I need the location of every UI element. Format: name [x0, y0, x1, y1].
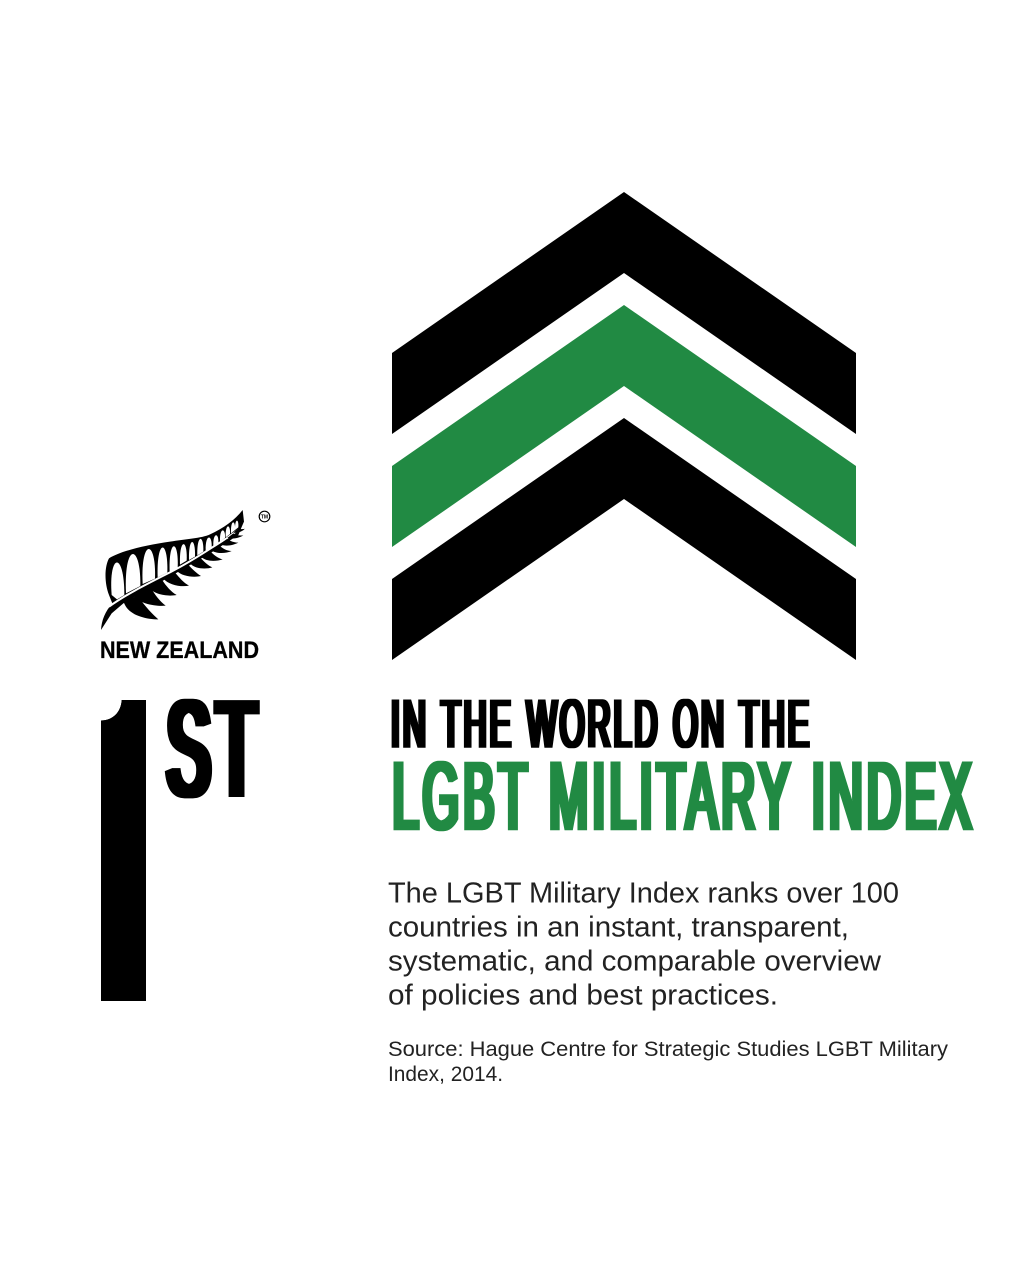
- icon: three stacked chevrons: [392, 192, 856, 660]
- source note: Index, 2014.: [388, 1063, 503, 1086]
- body paragraph: of policies and best practices.: [388, 980, 778, 1012]
- source note: [388, 1038, 949, 1086]
- icon: silver fern logo: [101, 510, 245, 630]
- body paragraph: The LGBT Military Index ranks over 100: [388, 878, 899, 910]
- infographic canvas: ST: [167, 673, 263, 824]
- infographic canvas: [101, 192, 974, 1084]
- body paragraph: [388, 878, 899, 1012]
- source note: Source: Hague Centre for Strategic Studies LGBT Military: [388, 1038, 949, 1061]
- logo wordmark: NEW ZEALAND: [100, 637, 259, 664]
- body paragraph: systematic, and comparable overview: [388, 946, 882, 978]
- body paragraph: countries in an instant, transparent,: [388, 912, 849, 944]
- icon: trademark mark: TM: [261, 514, 268, 520]
- rank numeral: 1: 1: [10, 604, 255, 1095]
- icon: trademark mark: [259, 511, 270, 522]
